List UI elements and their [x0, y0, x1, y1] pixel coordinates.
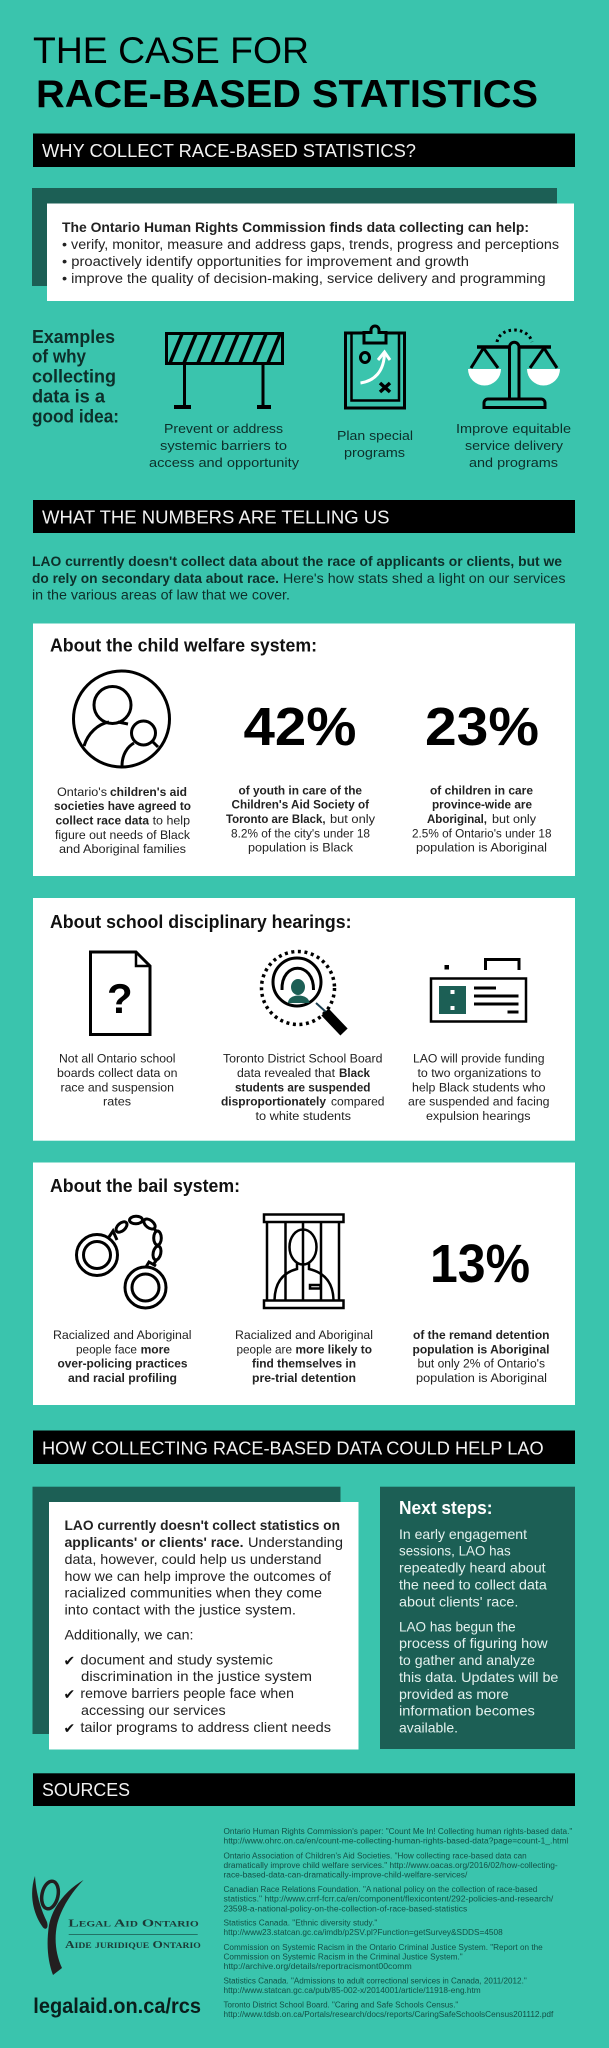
heading: how collecting race-based data could help LAO: HOW COLLECTING RACE-BASED DATA COULD HELP LAO [42, 1438, 544, 1458]
icon: scales of justice [468, 330, 560, 408]
text: 42% description: population is Black [248, 841, 354, 855]
text: Toronto District School Board: Toronto District School Board [223, 1052, 382, 1066]
text: sources list: Canadian Race Relations Foundation. "A national policy on the collection of race-based [224, 1885, 537, 1894]
text: aid societies: Ontario's [57, 785, 107, 799]
text: 42% description: but only [330, 812, 376, 826]
text: next steps body: available. [399, 1721, 458, 1736]
text: sources list: http://archive.org/details/reportracismont00comm [224, 1962, 412, 1971]
text: 23% description: 2.5% of Ontario's under 18 [412, 826, 552, 840]
heading: About the child welfare system: [50, 636, 317, 656]
text: pre-trial detention: more likely to [296, 1342, 372, 1356]
text: plan special programs [337, 428, 413, 460]
text: over-policing: people face [76, 1342, 137, 1356]
text: school boards [57, 1052, 178, 1109]
text: over-policing: over-policing practices [58, 1357, 188, 1371]
text: sources list: Ontario Association of Children's Aid Societies. "How collecting race-based data can [224, 1851, 527, 1860]
panel: next steps [380, 1487, 575, 1749]
text: aid societies: collect race data [56, 814, 149, 828]
text: sources list: Commission on Systemic Racism in the Criminal Justice System." [224, 1953, 463, 1962]
icon: funding card [431, 960, 526, 1022]
heading: Next steps: [399, 1498, 492, 1518]
text: next steps body [399, 1527, 559, 1736]
heading: why collect race-based statistics [33, 134, 575, 167]
text: aid societies: societies have agreed to [54, 799, 191, 813]
text: prevent barriers [149, 421, 299, 470]
text: sources list: race-based-data-can-dramatically-improve-child-welfare-services/ [224, 1871, 468, 1880]
text: sources list: Ontario Human Rights Commission's paper: "Count Me In! Collecting human rights-based data." [224, 1827, 573, 1836]
stat: 13%: 13% [430, 1234, 530, 1294]
checklist: ✔ [64, 1654, 75, 1670]
text: next steps body: In early engagement [399, 1527, 527, 1542]
text: understanding data paragraph: into contact with the justice system. [64, 1603, 296, 1618]
text: 42% description [226, 783, 376, 855]
text: prevent barriers: systemic barriers to [160, 438, 287, 453]
text: sources list: Commission on Systemic Racism in the Ontario Criminal Justice System. "Report on the [224, 1943, 543, 1952]
text: improve equitable service delivery [456, 421, 571, 470]
stat: 42%: 42% [244, 697, 356, 757]
icon: document with question mark [90, 952, 150, 1034]
text: improve equitable service delivery: Improve equitable [456, 421, 571, 436]
text: understanding data paragraph: applicants' or clients' race. [64, 1535, 244, 1550]
text: sources list: Statistics Canada. "Ethnic diversity study." [224, 1918, 378, 1927]
text: sources list: http://www.tdsb.on.ca/Portals/research/docs/reports/CaringSafeSchoolsCensus201112.pdf [224, 2010, 554, 2019]
panel: commission findings: • proactively identify opportunities for improvement and growth [62, 254, 469, 269]
icon: magnifier over person [262, 952, 344, 1032]
text: pre-trial detention: find themselves in [252, 1357, 356, 1371]
text: understanding data paragraph: how we can help improve the outcomes of [64, 1569, 331, 1584]
icon: parent and child in circle [74, 671, 170, 767]
heading: how collecting race-based data could help LAO [33, 1430, 575, 1464]
text: improve equitable service delivery: and programs [469, 455, 558, 470]
text: next steps body: LAO has begun the [399, 1619, 516, 1634]
text: understanding data paragraph: data, however, could help us understand [64, 1552, 322, 1567]
text: sources list: statistics." http://www.crrf-fcrr.ca/en/component/flexicontent/292-policies-and-research/ [224, 1895, 554, 1904]
text: sources list [224, 1827, 573, 2019]
text: intro paragraph: in the various areas of law that we cover. [32, 588, 290, 602]
text: next steps body: this data. Updates will be [399, 1670, 559, 1685]
text: Toronto District School Board: Black [339, 1066, 370, 1080]
text: sources list: http://www.ohrc.on.ca/en/count-me-collecting-human-rights-based-data?page=count-1_.html [224, 1837, 569, 1846]
title: THE CASE FOR [33, 30, 309, 71]
checklist: document and study systemic [80, 1653, 273, 1668]
text: plan special programs: programs [344, 445, 405, 460]
text: next steps body: repeatedly heard about [399, 1561, 546, 1576]
text: Toronto District School Board: to white students [256, 1109, 351, 1123]
text: examples of why collecting data is a good idea: collecting [32, 367, 116, 387]
checklist: accessing our services [81, 1703, 226, 1718]
logo: Legal Aid Ontario [32, 1876, 201, 1975]
text: next steps body: provided as more [399, 1687, 509, 1702]
heading: what the numbers are telling us [33, 500, 575, 533]
text: intro paragraph [32, 554, 566, 602]
text: aid societies: figure out needs of Black [55, 828, 191, 842]
panel: bail system [33, 1162, 575, 1405]
checklist: remove barriers people face when [80, 1686, 294, 1701]
text: examples of why collecting data is a good idea: of why [32, 347, 86, 367]
text: over-policing: more [141, 1342, 170, 1356]
text: website url: legalaid.on.ca/rcs [33, 1995, 201, 2018]
heading: sources [33, 1773, 575, 1806]
checklist: discrimination in the justice system [81, 1669, 312, 1684]
text: LAO funding: help Black students who [412, 1080, 546, 1094]
text: sources list: Toronto District School Board. "Caring and Safe Schools Census." [224, 2000, 459, 2009]
text: over-policing: Racialized and Aboriginal [53, 1328, 192, 1342]
text: over-policing: and racial profiling [68, 1371, 177, 1385]
heading: sources: SOURCES [42, 1780, 130, 1800]
heading: About school disciplinary hearings: [50, 912, 352, 932]
text: 42% description: Children's Aid Society of [232, 798, 370, 812]
text: pre-trial detention: Racialized and Aboriginal [235, 1328, 373, 1342]
panel: commission findings [32, 188, 574, 301]
text: understanding data paragraph [64, 1518, 343, 1642]
icon: document with question mark: ? [107, 975, 133, 1022]
text: 23% description: Aboriginal, [427, 812, 487, 826]
text: sources list: http://www23.statcan.gc.ca/imdb/p2SV.pl?Function=getSurvey&SDDS=4508 [224, 1928, 503, 1937]
text: LAO funding [408, 1052, 550, 1123]
text: LAO funding: to two organizations to [418, 1066, 541, 1080]
icon: person behind bars [264, 1214, 344, 1308]
text: 42% description: Toronto are Black, [226, 812, 326, 826]
text: 42% description: of youth in care of the [238, 783, 362, 797]
text: intro paragraph: do rely on secondary data about race. [32, 571, 279, 586]
text: Toronto District School Board: disproportionately [221, 1095, 326, 1109]
text: aid societies: and Aboriginal families [59, 842, 186, 856]
text: sources list: 23598-a-national-policy-on-the-collection-of-race-based-statistics [224, 1904, 467, 1913]
logo: Legal Aid Ontario: Legal Aid Ontario [68, 1918, 199, 1930]
text: understanding data paragraph: Understanding [248, 1535, 343, 1550]
text: understanding data paragraph: racialized communities when they come [64, 1586, 322, 1601]
text: aid societies: to help [153, 814, 190, 828]
checklist: ✔ [64, 1687, 75, 1703]
text: sources list: dramatically improve child welfare services." http://www.oacas.org/2016/02/how-collecting- [224, 1861, 558, 1870]
icon: clipboard with play diagram [346, 326, 404, 408]
panel: commission findings: • verify, monitor, measure and address gaps, trends, progress and perceptions [62, 237, 559, 252]
text: sources list: http://www.statcan.gc.ca/pub/85-002-x/2014001/article/11918-eng.htm [224, 1986, 481, 1995]
text: examples of why collecting data is a good idea [32, 327, 119, 427]
text: school boards: race and suspension [60, 1080, 174, 1094]
heading: About the bail system: [50, 1176, 240, 1196]
text: understanding data paragraph: Additionally, we can: [64, 1627, 194, 1642]
text: next steps body: sessions, LAO has [399, 1544, 511, 1559]
text: next steps body: to gather and analyze [399, 1653, 535, 1668]
text: next steps body: process of figuring how [399, 1636, 548, 1651]
text: sources list: Statistics Canada. "Admissions to adult correctional services in Canada, 2011/2012." [224, 1976, 527, 1985]
text: 13% description [412, 1328, 550, 1385]
checklist: tailor programs to address client needs [80, 1720, 331, 1735]
text: prevent barriers: access and opportunity [149, 455, 299, 470]
panel: school disciplinary hearings [33, 898, 575, 1141]
text: understanding data paragraph: LAO currently doesn't collect statistics on [64, 1518, 340, 1533]
title [33, 30, 538, 116]
text: pre-trial detention [235, 1328, 373, 1385]
text: examples of why collecting data is a good idea: good idea: [32, 407, 119, 427]
checklist: ✔ [64, 1721, 75, 1737]
text: aid societies: children's aid [110, 785, 187, 799]
text: 13% description: population is Aboriginal [416, 1371, 547, 1385]
text: next steps body: the need to collect data [399, 1578, 547, 1593]
text: examples of why collecting data is a good idea: Examples [32, 327, 115, 347]
text: 23% description: province-wide are [432, 798, 532, 812]
text: 13% description: of the remand detention [413, 1328, 550, 1342]
text: Toronto District School Board: compared [331, 1095, 384, 1109]
text: examples of why collecting data is a good idea: data is a [32, 387, 106, 407]
text: Toronto District School Board: students are suspended [235, 1080, 370, 1094]
heading: what the numbers are telling us: WHAT THE NUMBERS ARE TELLING US [42, 508, 390, 528]
text: LAO funding: are suspended and facing [408, 1095, 550, 1109]
text: pre-trial detention: pre-trial detention [252, 1371, 356, 1385]
text: plan special programs: Plan special [337, 428, 413, 443]
icon: barrier [166, 334, 282, 407]
text: 23% description: but only [492, 812, 537, 826]
panel: how data could help [32, 1487, 358, 1750]
text: 13% description: population is Aboriginal [412, 1342, 550, 1356]
panel: commission findings: The Ontario Human Rights Commission finds data collecting can help: [62, 220, 529, 235]
title: RACE-BASED STATISTICS [36, 73, 538, 116]
text: intro paragraph: LAO currently doesn't collect data about the race of applicants or clients, but we [32, 554, 562, 569]
heading: why collect race-based statistics: WHY COLLECT RACE-BASED STATISTICS? [42, 141, 416, 161]
text: LAO funding: expulsion hearings [426, 1109, 530, 1123]
text: 42% description: 8.2% of the city's under 18 [231, 826, 370, 840]
text: 13% description: but only 2% of Ontario's [418, 1357, 545, 1371]
text: next steps body: information becomes [399, 1704, 535, 1719]
icon: handcuffs [76, 1216, 166, 1308]
stat: 23%: 23% [425, 697, 539, 757]
text: over-policing [53, 1328, 192, 1385]
checklist [64, 1653, 331, 1737]
text: 23% description: population is Aboriginal [416, 841, 547, 855]
text: improve equitable service delivery: service delivery [465, 438, 563, 453]
panel: child welfare system [33, 624, 575, 876]
text: intro paragraph: Here's how stats shed a light on our services [283, 571, 566, 586]
text: school boards: rates [103, 1095, 131, 1109]
text: prevent barriers: Prevent or address [164, 421, 283, 436]
text: pre-trial detention: people are [236, 1342, 292, 1356]
text: next steps body: about clients' race. [399, 1594, 518, 1609]
text: LAO funding: LAO will provide funding [413, 1052, 544, 1066]
text: 23% description: of children in care [430, 783, 533, 797]
text: 23% description [412, 783, 552, 855]
panel: commission findings: • improve the quality of decision-making, service delivery and programming [62, 271, 546, 286]
text: school boards: boards collect data on [57, 1066, 178, 1080]
text: school boards: Not all Ontario school [59, 1052, 176, 1066]
text: Toronto District School Board [221, 1052, 384, 1123]
text: Toronto District School Board: data revealed that [237, 1066, 336, 1080]
logo: Legal Aid Ontario: Aide juridique Ontario [65, 1939, 201, 1951]
text: aid societies [54, 785, 191, 856]
